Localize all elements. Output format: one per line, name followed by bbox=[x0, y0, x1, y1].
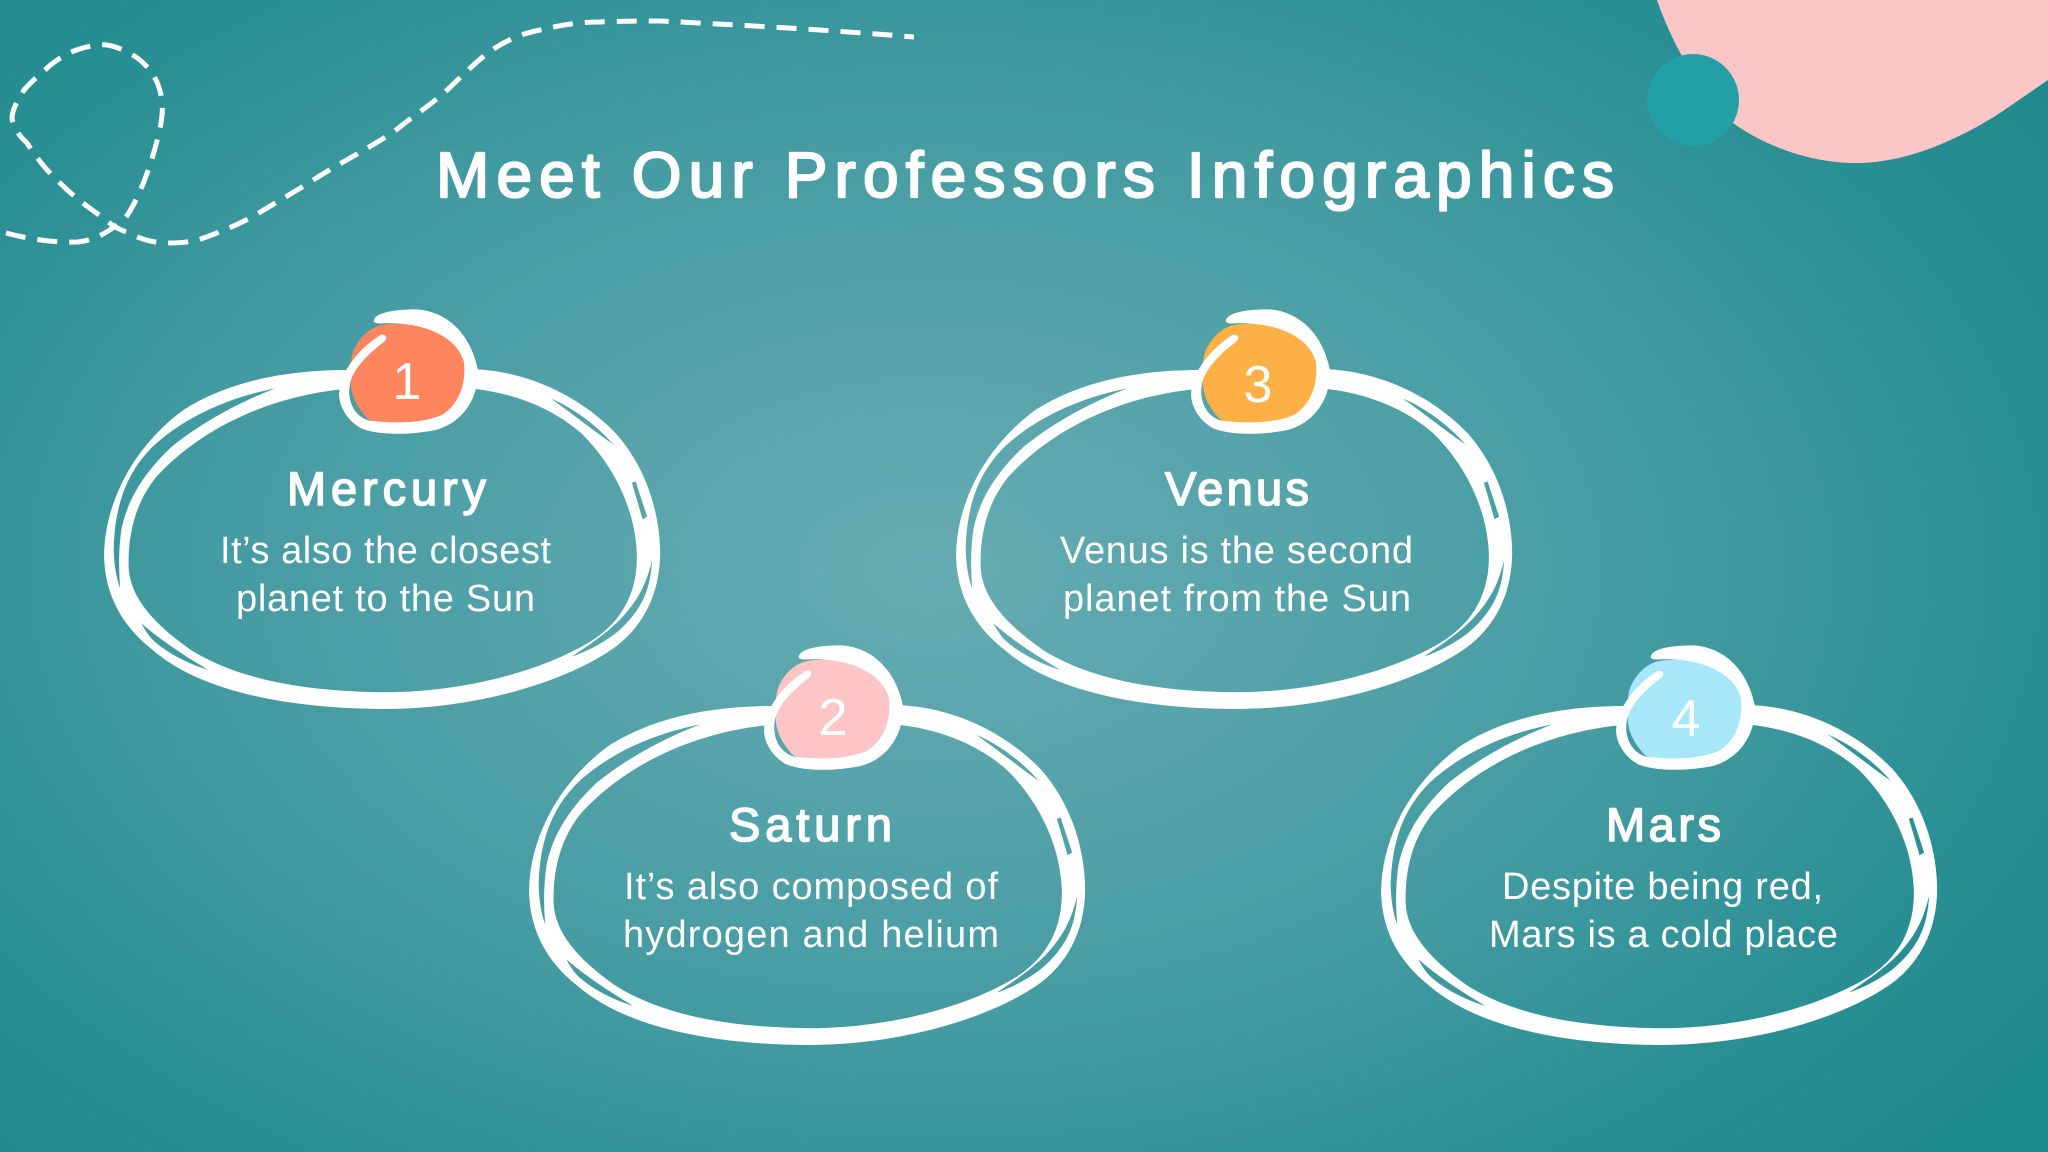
description: planet to the Sun bbox=[236, 578, 535, 620]
number badge bbox=[1616, 645, 1755, 770]
description bbox=[1489, 866, 1838, 956]
description bbox=[623, 866, 999, 956]
description bbox=[220, 530, 551, 620]
title: Meet Our Professors Infographics bbox=[436, 139, 1614, 211]
number badge: 4 bbox=[1672, 690, 1700, 748]
description: planet from the Sun bbox=[1063, 578, 1411, 620]
ring outline bbox=[956, 369, 1512, 709]
ring outline bbox=[1381, 705, 1937, 1045]
dashed path decoration bbox=[6, 21, 914, 243]
number badge bbox=[1191, 309, 1330, 434]
heading: Venus bbox=[1165, 462, 1309, 515]
description bbox=[1060, 530, 1413, 620]
description: It’s also composed of bbox=[624, 866, 998, 908]
card: Venus bbox=[956, 309, 1512, 709]
heading: Mars bbox=[1606, 798, 1721, 851]
heading: Saturn bbox=[729, 798, 892, 851]
description: hydrogen and helium bbox=[623, 914, 999, 956]
card: Mercury bbox=[104, 309, 660, 709]
number badge: 2 bbox=[819, 689, 847, 747]
number badge bbox=[339, 309, 478, 434]
card: Saturn bbox=[529, 645, 1085, 1045]
description: Mars is a cold place bbox=[1489, 914, 1838, 956]
teal circle bbox=[1647, 54, 1739, 146]
card: Mars bbox=[1381, 645, 1937, 1045]
ring outline bbox=[104, 369, 660, 709]
number badge: 3 bbox=[1244, 356, 1272, 414]
ring outline bbox=[529, 705, 1085, 1045]
description: Venus is the second bbox=[1060, 530, 1413, 572]
number badge: 1 bbox=[393, 353, 421, 411]
description: Despite being red, bbox=[1502, 866, 1823, 908]
number badge bbox=[764, 645, 903, 770]
pink corner blob bbox=[1657, 0, 2048, 163]
description: It’s also the closest bbox=[220, 530, 551, 572]
heading: Mercury bbox=[287, 462, 486, 515]
